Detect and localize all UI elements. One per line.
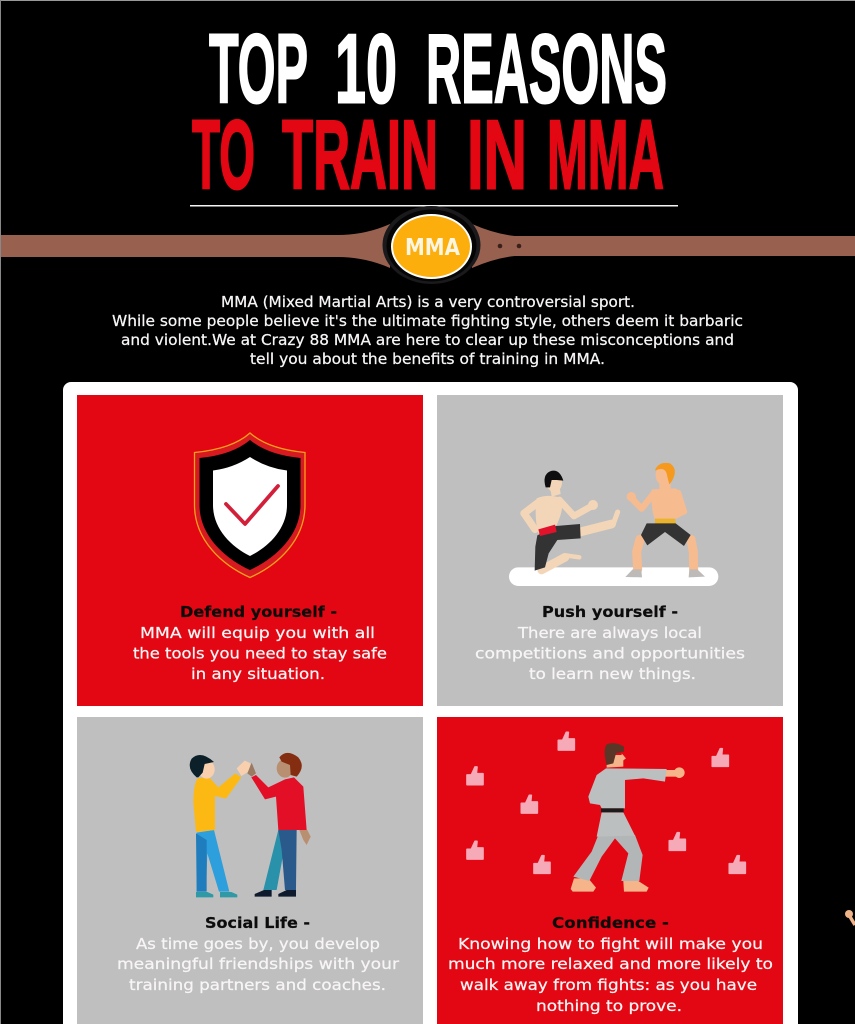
white panel xyxy=(63,382,798,1024)
intro paragraph: MMA (Mixed Martial Arts) is a very controversial sport. xyxy=(221,293,635,311)
text: confidence: much more relaxed and more likely to xyxy=(448,955,773,973)
text: push yourself: There are always local xyxy=(517,624,702,642)
icon: shield with check xyxy=(194,433,305,578)
icon: thumbs up scattered xyxy=(467,732,745,873)
panel: social life xyxy=(77,717,423,1024)
text: push yourself xyxy=(475,603,745,683)
intro paragraph: tell you about the benefits of training in MMA. xyxy=(250,350,605,368)
text: confidence xyxy=(448,914,773,1015)
champion belt divider: MMA xyxy=(405,235,460,261)
right person xyxy=(247,753,311,897)
text: defend yourself: the tools you need to stay safe xyxy=(133,644,387,662)
text: social life: training partners and coaches. xyxy=(129,976,386,994)
text: defend yourself: in any situation. xyxy=(191,665,325,683)
title: TO xyxy=(192,100,255,210)
title: TOP xyxy=(209,14,308,124)
panel: push yourself xyxy=(437,395,783,706)
text: social life: Social Life - xyxy=(205,914,310,932)
text: confidence: walk away from fights: as you have xyxy=(460,976,757,994)
text: social life: As time goes by, you develop xyxy=(136,935,380,953)
champion belt divider xyxy=(1,206,855,284)
icon: fist at right edge xyxy=(845,910,855,925)
intro paragraph xyxy=(112,293,743,368)
icon: karate fighter punching xyxy=(571,743,685,892)
left fighter xyxy=(524,471,618,571)
left person xyxy=(190,755,251,897)
title: TRAIN xyxy=(282,100,438,210)
text: defend yourself: MMA will equip you with all xyxy=(140,624,375,642)
title: IN xyxy=(467,100,527,210)
icon: two fighters on a mat xyxy=(509,463,718,586)
right fighter xyxy=(625,463,705,577)
text: confidence: Confidence - xyxy=(552,914,669,932)
title xyxy=(192,14,667,210)
text: confidence: Knowing how to fight will make you xyxy=(458,935,763,953)
intro paragraph: and violent.We at Crazy 88 MMA are here to clear up these misconceptions and xyxy=(121,331,734,349)
panel: confidence xyxy=(437,717,783,1024)
text: push yourself: to learn new things. xyxy=(529,665,696,683)
text: defend yourself: Defend yourself - xyxy=(180,603,337,621)
text: social life xyxy=(117,914,400,994)
text: confidence: nothing to prove. xyxy=(536,997,682,1015)
text: push yourself: Push yourself - xyxy=(542,603,678,621)
text: defend yourself xyxy=(133,603,387,683)
title: 10 xyxy=(335,14,397,124)
intro paragraph: While some people believe it's the ultimate fighting style, others deem it barbaric xyxy=(112,312,743,330)
panel: defend yourself xyxy=(77,395,423,706)
title: MMA xyxy=(547,100,664,210)
text: social life: meaningful friendships with your xyxy=(117,955,400,973)
icon: two people high five xyxy=(190,753,311,897)
text: push yourself: competitions and opportunities xyxy=(475,644,745,662)
